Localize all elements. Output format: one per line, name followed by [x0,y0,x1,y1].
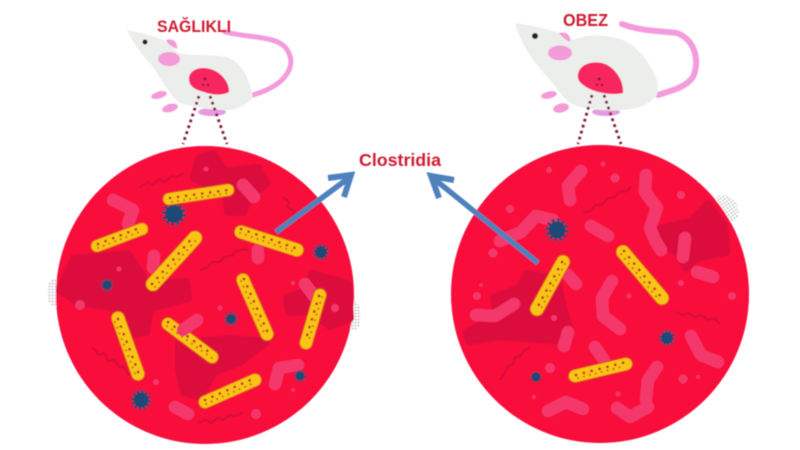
viruses [531,220,674,382]
pink bacterium overlapping yellow rod [183,320,197,330]
ear [559,32,570,42]
arrow: obese to Clostridia [431,176,538,263]
label: Clostridia: Clostridia [359,150,441,170]
body [515,23,658,111]
squiggles [500,187,720,380]
arrow: healthy to Clostridia [276,175,351,232]
heading: OBEZ: OBEZ [563,10,608,30]
squiggles [93,173,300,423]
mouse: healthy [127,30,291,144]
mouse: obese [515,23,696,144]
cheek [548,46,572,60]
body [127,30,253,110]
dark patches [467,204,726,341]
eye [532,33,538,39]
heading: SAĞLIKLI: SAĞLIKLI [157,17,231,36]
dark patches [60,154,350,396]
tail [622,24,696,95]
ear [166,39,177,49]
dotted connector lines [183,78,227,144]
feet [540,90,620,116]
gut [189,68,229,95]
eye [142,40,148,44]
viruses [102,204,328,409]
gut [578,62,623,94]
panel: obese microbiota circle [451,145,749,443]
cheek [158,52,180,66]
hatched blotches outside circle edge [47,279,361,331]
tail [225,32,291,95]
pink bacteria [473,162,736,417]
circle background [56,146,354,444]
dotted connector lines [578,78,621,144]
panel: healthy microbiota circle [47,146,361,444]
hatched blotch outside circle edge [710,190,744,226]
pink bacteria [75,166,339,419]
feet [150,90,226,116]
yellow bacteria [97,190,322,404]
circle background [451,145,749,443]
yellow bacteria [537,251,662,378]
